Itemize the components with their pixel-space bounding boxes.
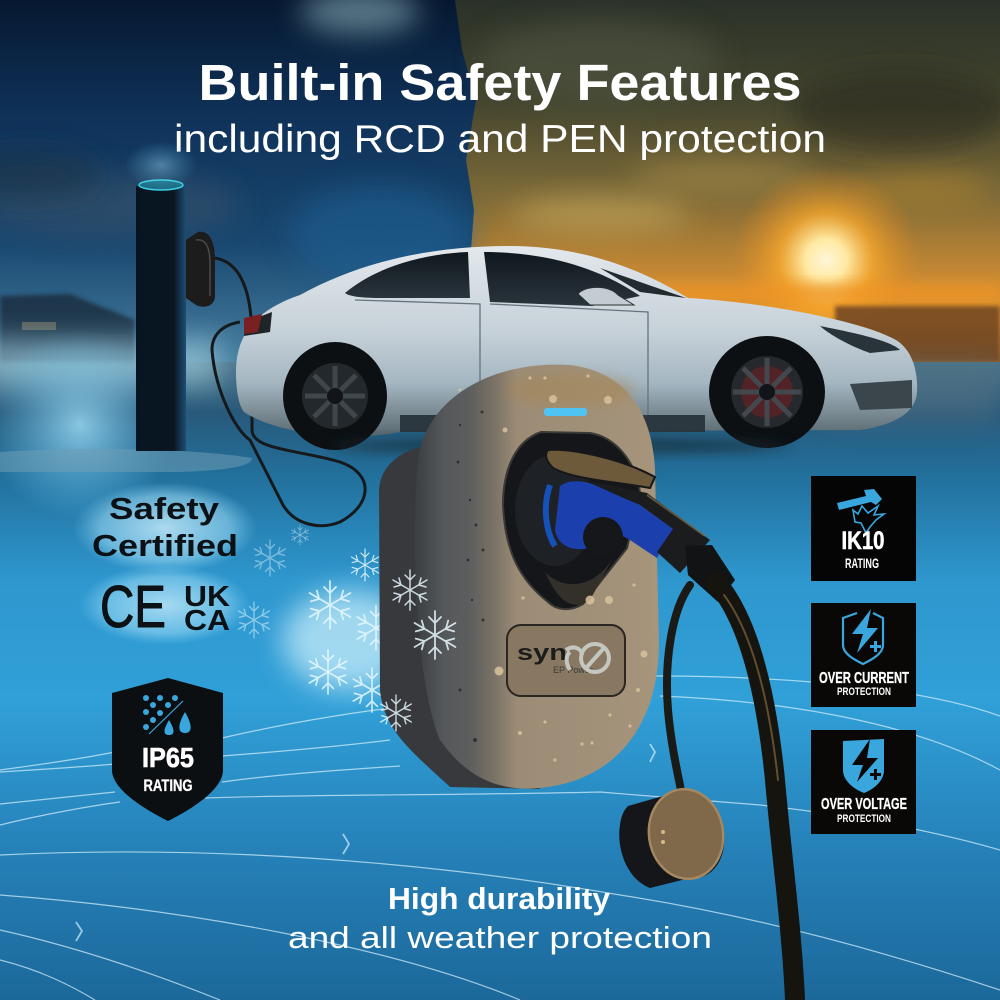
charging cable: [667, 582, 795, 1000]
UKCA mark: CA: [184, 605, 230, 637]
charger rear mount: [379, 446, 540, 789]
status LED: [544, 408, 587, 416]
snowflake cluster: [239, 525, 418, 712]
connector flap: [546, 450, 655, 488]
blue connector plug: [555, 481, 673, 558]
IK10 rating badge: [811, 476, 916, 581]
title: Built-in Safety Features: [198, 54, 802, 111]
icon: water dots and drops: [143, 695, 191, 735]
over current badge: PROTECTION: [837, 686, 891, 698]
IP65 shield badge: RATING: [144, 776, 192, 795]
over voltage badge: [811, 730, 916, 834]
icon: outlined shield with bolt: [843, 609, 883, 664]
socket cap: [619, 784, 729, 888]
logo text: syn: [517, 640, 567, 665]
charging post: [0, 141, 365, 526]
IK10 rating badge: IK10: [842, 527, 884, 555]
charger body: [414, 365, 659, 789]
over current badge: [811, 603, 916, 707]
background light lines on water: [0, 676, 1000, 1000]
wall charger: [379, 365, 735, 789]
footer heading: High durability: [388, 881, 611, 916]
IK10 rating badge: RATING: [845, 555, 879, 571]
over voltage badge: PROTECTION: [837, 813, 891, 825]
snow in front of charger: [415, 611, 455, 659]
gold top light: [505, 374, 635, 406]
safety certified badge: Certified: [92, 528, 238, 563]
subtitle: including RCD and PEN protection: [174, 118, 826, 161]
CE mark: CE: [100, 574, 166, 640]
over voltage badge: OVER VOLTAGE: [821, 796, 907, 813]
chevron marks on water: [76, 744, 655, 941]
charging socket: [503, 432, 640, 609]
icon: filled shield with bolt: [843, 739, 884, 793]
electric car: [236, 246, 917, 454]
UKCA mark: UK: [184, 581, 230, 613]
over current badge: OVER CURRENT: [819, 670, 909, 687]
water droplets: [458, 374, 648, 762]
footer subheading: and all weather protection: [288, 920, 712, 955]
strain relief: [685, 545, 735, 602]
IP65 shield badge: IP65: [142, 742, 194, 773]
icon: hammer: [837, 489, 884, 533]
safety certified badge: Safety: [109, 491, 220, 526]
wall charger: EP Power: [553, 665, 593, 675]
IP65 shield badge: [112, 678, 223, 821]
safety certified badge: [73, 482, 257, 645]
UKCA mark: [184, 581, 230, 637]
cap tether: [667, 585, 690, 795]
logo plate: [507, 625, 625, 696]
